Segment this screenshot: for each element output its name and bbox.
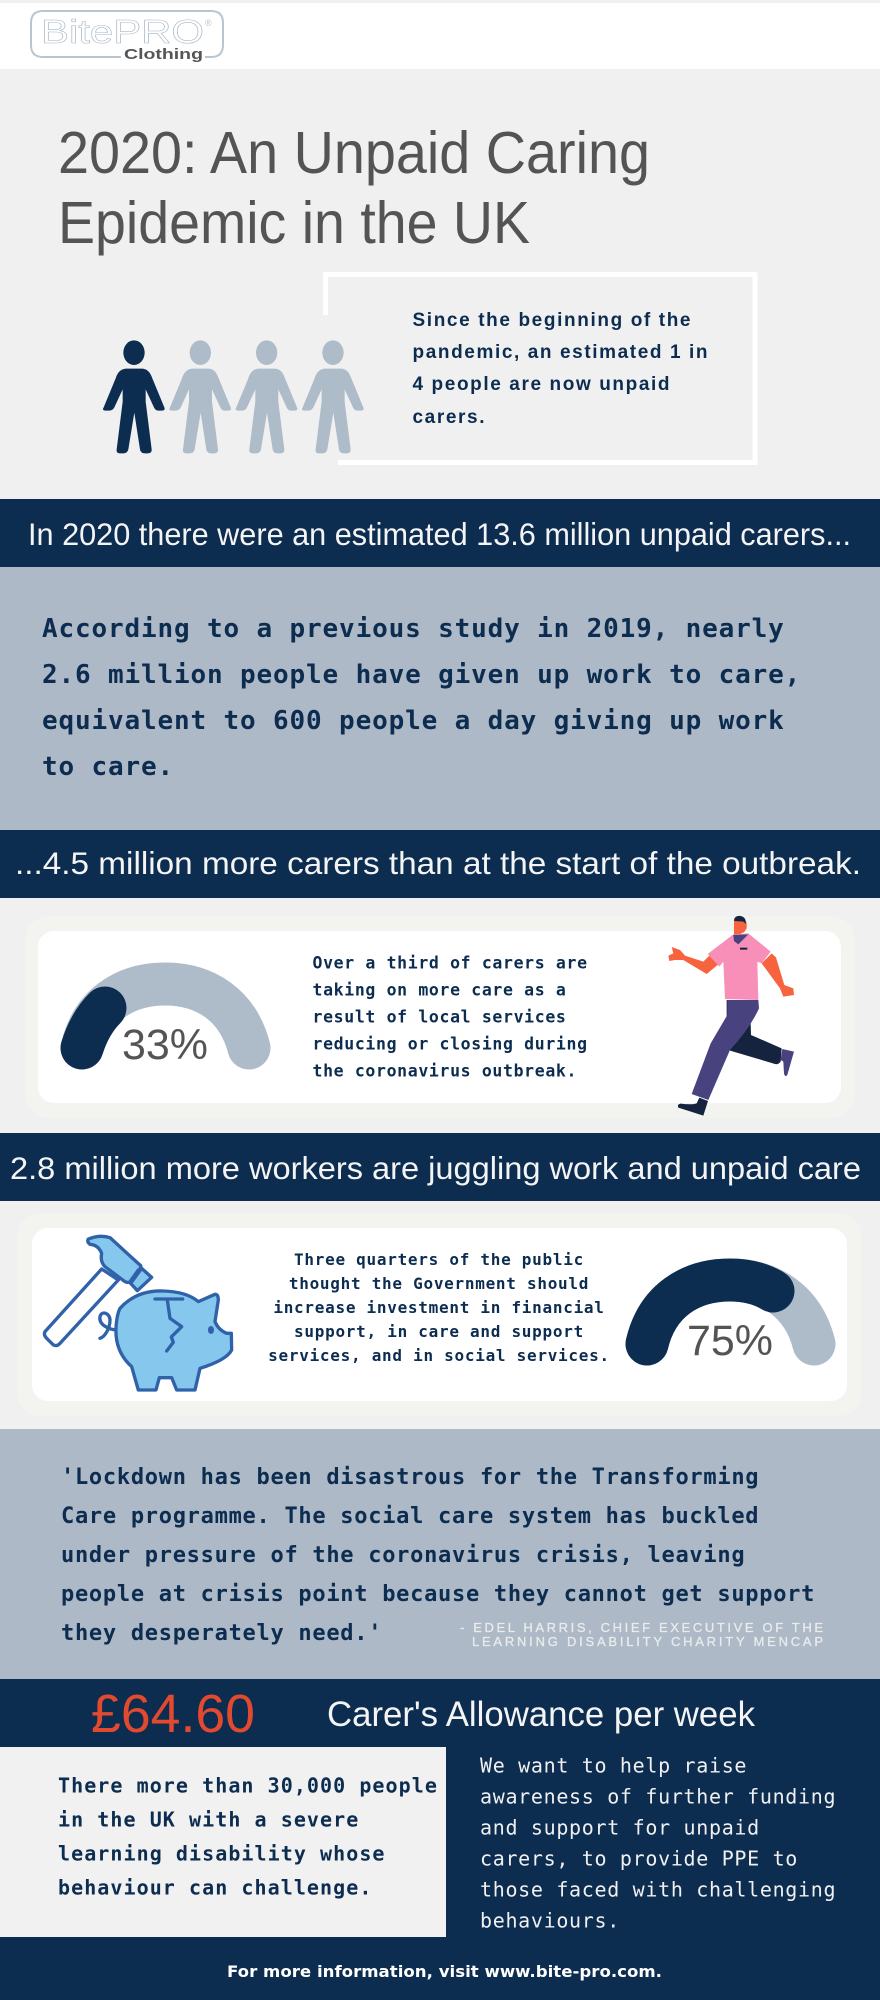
panel: 2019 study: equivalent to 600 people a day giving up work xyxy=(42,706,785,736)
intro text: pandemic, an estimated 1 in xyxy=(412,342,708,363)
box: 30,000 people: in the UK with a severe xyxy=(58,1808,359,1832)
logo: BitePRO Clothing: Clothing xyxy=(124,46,203,63)
title: 2020: An Unpaid Caring xyxy=(58,120,650,186)
stat: carer's allowance: £64.60 xyxy=(91,1684,255,1744)
gauge: 75% xyxy=(647,1280,814,1365)
header band with logo xyxy=(0,3,880,69)
text: over a third: Over a third of carers are xyxy=(312,954,588,972)
text: three quarters: support, in care and support xyxy=(294,1322,584,1341)
text: three quarters: increase investment in financial xyxy=(273,1298,605,1317)
banner: 13.6 million xyxy=(0,499,880,567)
gauge: 33%: 33% xyxy=(122,1021,208,1069)
intro text: 4 people are now unpaid xyxy=(412,374,670,395)
banner: 13.6 million: In 2020 there were an estimated 13.6 million unpaid carers... xyxy=(28,516,851,552)
footer: For more information, visit www.bite-pro.com. xyxy=(227,1962,662,1981)
quote attribution: LEARNING DISABILITY CHARITY MENCAP xyxy=(472,1634,823,1649)
banner: 2.8 million xyxy=(0,1133,880,1201)
text: raise awareness: We want to help raise xyxy=(480,1754,747,1778)
intro text xyxy=(412,310,708,428)
text: over a third xyxy=(312,954,588,1080)
title: Epidemic in the UK xyxy=(58,190,530,256)
panel: one in four intro xyxy=(103,274,755,462)
panel: quote: Care programme. The social care system has buckled xyxy=(61,1504,759,1529)
panel: quote: people at crisis point because they cannot get support xyxy=(61,1582,815,1607)
stat: carer's allowance xyxy=(91,1684,755,1744)
banner: 2.8 million: 2.8 million more workers are juggling work and unpaid care xyxy=(10,1150,861,1186)
banner: 4.5 million: ...4.5 million more carers than at the start of the outbreak. xyxy=(15,845,861,881)
quote attribution: - EDEL HARRIS, CHIEF EXECUTIVE OF THE xyxy=(460,1620,823,1635)
text: raise awareness: awareness of further funding xyxy=(480,1784,836,1808)
intro text: carers. xyxy=(412,407,484,428)
panel: 2019 study xyxy=(0,567,880,830)
text: over a third: result of local services xyxy=(312,1008,567,1026)
icon: hammer and cracked piggy bank xyxy=(44,1236,232,1390)
logo: BitePRO Clothing: ® xyxy=(205,18,212,28)
text: over a third: the coronavirus outbreak. xyxy=(312,1062,577,1080)
stat: carer's allowance: Carer's Allowance per week xyxy=(327,1695,755,1734)
panel: 2019 study: 2.6 million people have given up work to care, xyxy=(42,660,801,690)
text: over a third: reducing or closing during xyxy=(312,1034,588,1054)
text: three quarters xyxy=(268,1250,610,1365)
title xyxy=(58,120,650,256)
panel: quote: 'Lockdown has been disastrous for the Transforming xyxy=(61,1465,759,1490)
text: raise awareness: and support for unpaid xyxy=(480,1816,760,1840)
text: over a third: taking on more care as a xyxy=(312,980,567,1000)
gauge: 33% xyxy=(82,984,249,1069)
panel: 75 percent xyxy=(17,1213,862,1416)
text: three quarters: Three quarters of the public xyxy=(294,1250,584,1269)
text: raise awareness: carers, to provide PPE to xyxy=(480,1846,798,1870)
box: 30,000 people: behaviour can challenge. xyxy=(58,1876,372,1900)
box: 30,000 people xyxy=(0,1747,446,1937)
text: three quarters: thought the Government should xyxy=(289,1274,589,1293)
panel: 33 percent xyxy=(25,916,855,1118)
gauge: 75%: 75% xyxy=(687,1317,773,1365)
icon: running carer xyxy=(668,916,794,1116)
box: 30,000 people: There more than 30,000 people xyxy=(58,1774,438,1798)
text: three quarters: services, and in social services. xyxy=(268,1346,610,1365)
text: raise awareness xyxy=(480,1754,836,1932)
text: raise awareness: those faced with challenging xyxy=(480,1878,836,1902)
panel: 2019 study: to care. xyxy=(42,752,174,782)
banner: 4.5 million xyxy=(0,830,880,898)
box: 30,000 people: learning disability whose xyxy=(58,1842,386,1866)
panel: quote: they desperately need.' xyxy=(61,1621,382,1646)
logo: BitePRO Clothing xyxy=(31,11,223,63)
text: raise awareness: behaviours. xyxy=(480,1908,620,1932)
panel: navy lower section xyxy=(0,1679,880,2000)
panel: quote xyxy=(0,1429,880,1679)
intro text: Since the beginning of the xyxy=(412,310,690,331)
quote attribution xyxy=(460,1620,823,1649)
panel: quote: under pressure of the coronavirus crisis, leaving xyxy=(61,1543,745,1568)
panel: 2019 study: According to a previous study in 2019, nearly xyxy=(42,614,785,644)
icon: four people, one highlighted xyxy=(103,340,364,453)
logo: BitePRO Clothing: BitePRO xyxy=(41,13,204,50)
